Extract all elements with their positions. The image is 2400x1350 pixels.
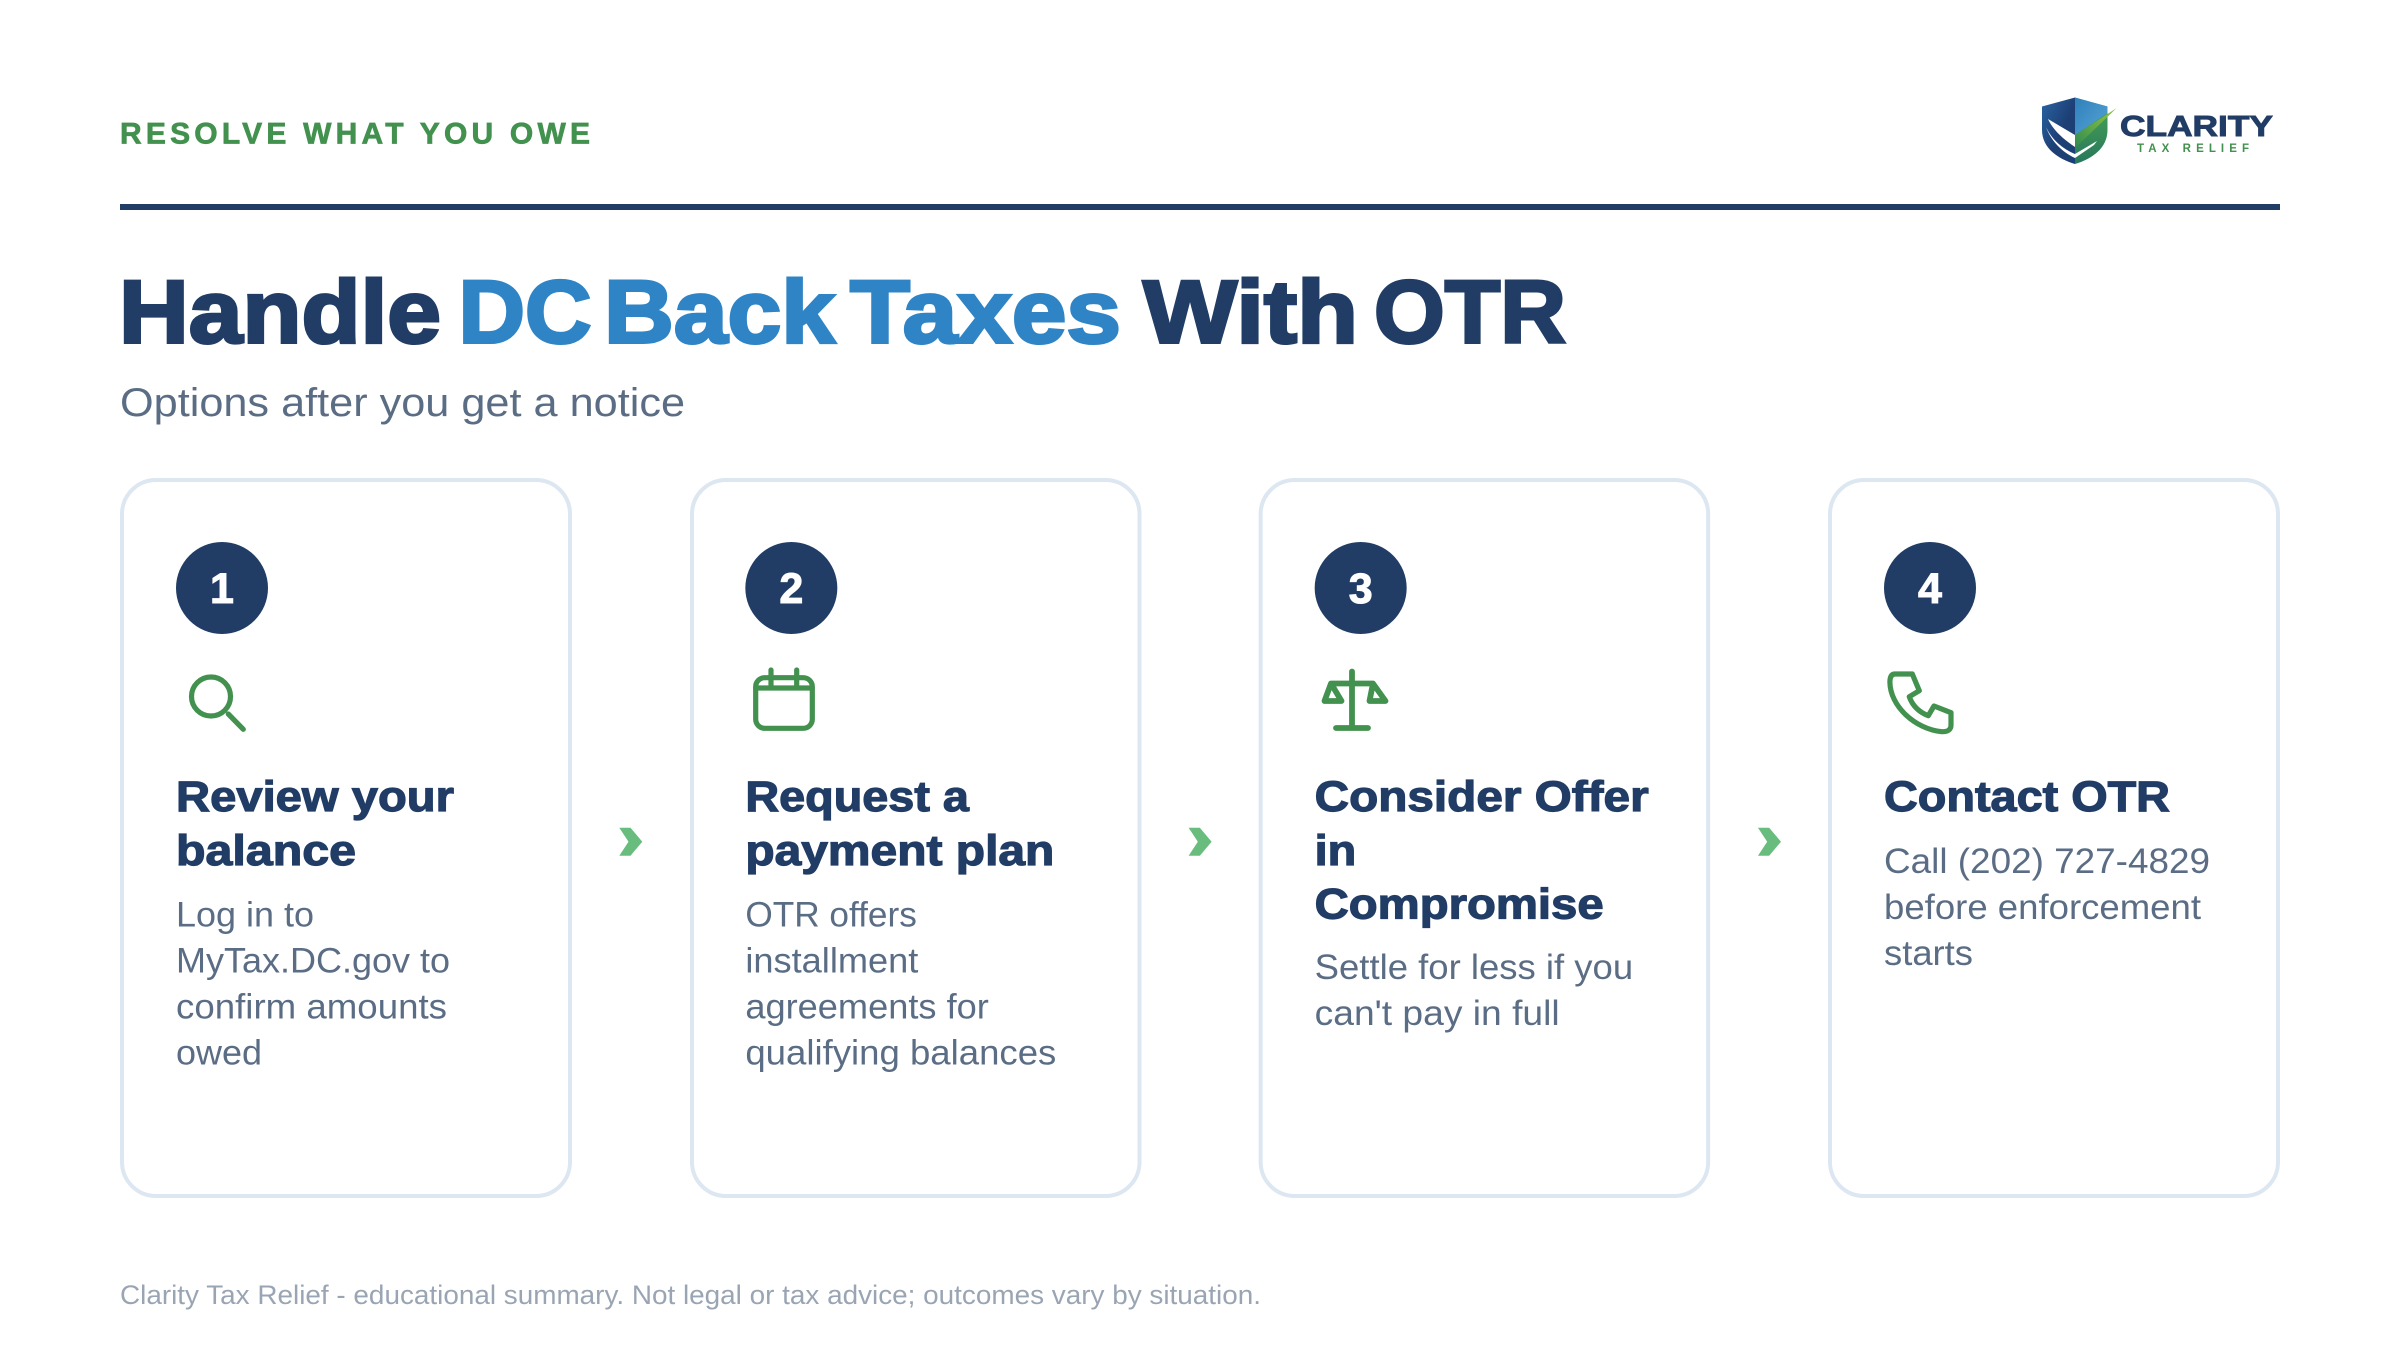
step description (745, 896, 1056, 1072)
step description: Settle for less if you (1315, 948, 1633, 987)
title: Taxes (850, 262, 1121, 362)
step heading: Consider Offer (1315, 773, 1649, 821)
step heading (1315, 773, 1649, 928)
title: With (1143, 262, 1358, 362)
step description: starts (1884, 934, 1973, 973)
step number 3 (1315, 542, 1407, 634)
step heading: payment plan (745, 827, 1054, 875)
panel: step 3 consider offer in compromise (1261, 480, 1708, 1196)
step number 1 (176, 542, 268, 634)
step number 3: 3 (1349, 565, 1373, 613)
title: OTR (1374, 262, 1566, 362)
panel: step 2 request a payment plan (692, 480, 1140, 1196)
logo: Clarity Tax Relief (2042, 98, 2273, 164)
step description: can't pay in full (1315, 994, 1560, 1033)
step description: MyTax.DC.gov to (176, 942, 450, 980)
step number 2: 2 (779, 565, 803, 613)
title: Handle (119, 262, 441, 362)
step heading: Contact OTR (1884, 773, 2170, 821)
step heading: Compromise (1315, 880, 1604, 928)
card frame (122, 480, 570, 1196)
step number 1: 1 (210, 565, 234, 613)
footer disclaimer: Clarity Tax Relief - educational summary. Not legal or tax advice; outcomes vary by situation. (120, 1280, 1261, 1310)
step heading: Review your (176, 773, 454, 821)
step description: OTR offers (745, 896, 917, 934)
step description: Call (202) 727-4829 (1884, 842, 2210, 881)
arrow 2 (1189, 828, 1212, 856)
step description: qualifying balances (745, 1034, 1056, 1072)
step description: before enforcement (1884, 888, 2201, 927)
icon: calendar (756, 670, 812, 728)
title: DC (458, 262, 592, 362)
step description (1884, 842, 2210, 973)
panel: step 1 review your balance (122, 480, 570, 1196)
step description: agreements for (745, 988, 989, 1026)
step heading: Request a (745, 773, 970, 821)
arrow 3 (1758, 828, 1781, 856)
arrow 1 (619, 828, 642, 856)
step heading (176, 773, 454, 875)
icon: magnifying glass (192, 677, 243, 729)
logo wordmark: CLARITY (2120, 111, 2273, 143)
card frame (692, 480, 1140, 1196)
panel: step 4 contact OTR (1830, 480, 2278, 1196)
step number 4 (1884, 542, 1976, 634)
card frame (1261, 480, 1708, 1196)
step description: confirm amounts (176, 988, 447, 1026)
step description (1315, 948, 1633, 1033)
card frame (1830, 480, 2278, 1196)
step number 4: 4 (1918, 565, 1942, 613)
step description: installment (745, 942, 919, 980)
title (119, 262, 1566, 362)
subtitle: Options after you get a notice (120, 381, 685, 425)
step description: owed (176, 1034, 262, 1072)
step heading: in (1315, 827, 1356, 875)
icon: balance scale (1324, 672, 1386, 728)
header rule (120, 204, 2280, 210)
step number 2 (745, 542, 837, 634)
icon: phone (1890, 674, 1951, 732)
step description (176, 896, 450, 1072)
logo tagline: TAX RELIEF (2137, 143, 2249, 155)
title: Back (604, 262, 836, 362)
logo shield (2042, 98, 2117, 164)
step heading: balance (176, 827, 356, 875)
step description: Log in to (176, 896, 314, 934)
step heading (745, 773, 1054, 875)
eyebrow heading: RESOLVE WHAT YOU OWE (120, 118, 590, 151)
